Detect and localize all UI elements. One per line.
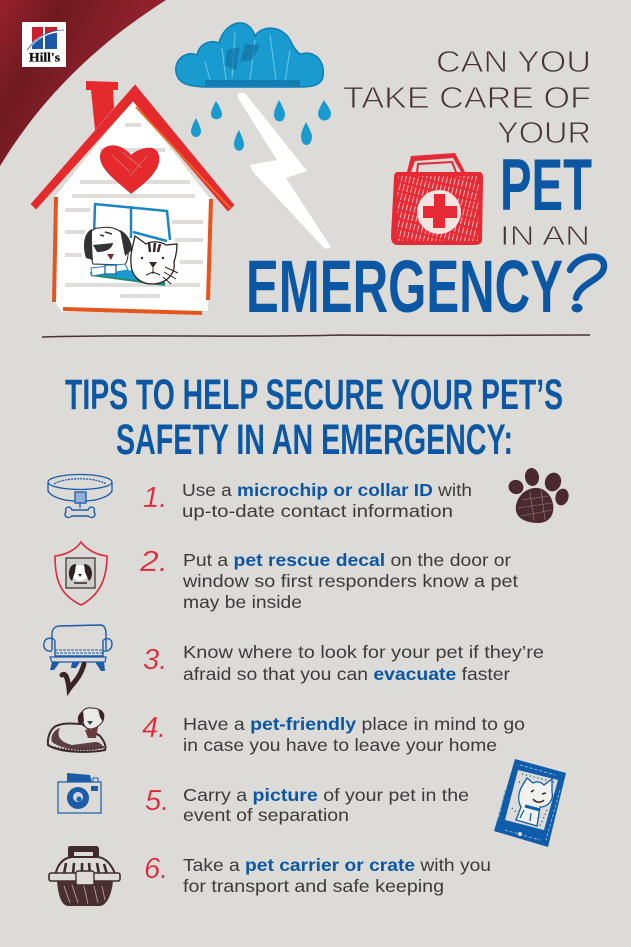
tip 1: up-to-date contact information xyxy=(182,501,453,521)
text 3: Know where to look for your pet if they’re xyxy=(183,642,544,662)
red corner banner xyxy=(0,0,166,166)
walls xyxy=(54,197,211,313)
text 6: Take a pet carrier or crate with you xyxy=(183,855,491,875)
icon: rain drops xyxy=(191,100,331,151)
icon: sofa with hiding pet tail xyxy=(44,625,112,689)
tip 3: afraid so that you can evacuate faster xyxy=(183,664,510,684)
text 2: Put a pet rescue decal on the door or xyxy=(183,550,511,570)
number 3: 3. xyxy=(143,644,167,676)
text 1: Use a microchip or collar ID with xyxy=(182,480,472,500)
icon: first aid kit xyxy=(391,153,483,245)
number 5: 5. xyxy=(145,785,169,817)
tip 5 xyxy=(58,773,469,825)
Hill's logo xyxy=(22,22,66,67)
title: can you take care of your pet in an emergency: IN AN xyxy=(500,220,590,251)
roof xyxy=(32,86,233,210)
text 5: Carry a picture of your pet in the xyxy=(183,785,469,805)
heart xyxy=(100,145,159,194)
number 2: 2. xyxy=(139,546,168,578)
icon: lightning bolt xyxy=(238,93,331,249)
tip 2: window so first responders know a pet xyxy=(182,571,518,591)
title: can you take care of your pet in an emergency: YOUR xyxy=(497,115,591,150)
icon: paw print xyxy=(507,467,570,523)
number 1: 1. xyxy=(143,482,167,514)
Hill's logo: Hill's xyxy=(29,50,60,64)
icon: collar with bone xyxy=(48,474,112,517)
icon: camera xyxy=(58,773,101,813)
title: can you take care of your pet in an emergency: TAKE CARE OF xyxy=(343,80,591,115)
text 4: Have a pet-friendly place in mind to go xyxy=(183,714,525,734)
tip 1 xyxy=(48,474,472,521)
dog xyxy=(88,227,128,265)
icon: pet carrier xyxy=(49,846,120,906)
tip 2: may be inside xyxy=(183,592,302,612)
house body xyxy=(54,100,211,312)
heading: tips xyxy=(65,371,563,464)
icon: phone with pet photo xyxy=(494,759,566,847)
title: can you take care of your pet in an emergency xyxy=(246,44,604,328)
number 6: 6. xyxy=(144,853,168,885)
tip 6 xyxy=(49,846,491,906)
window xyxy=(94,204,170,241)
title: can you take care of your pet in an emergency: CAN YOU xyxy=(436,44,591,79)
chimney xyxy=(86,81,118,130)
tip 2 xyxy=(55,542,518,612)
tip 4: in case you have to leave your home xyxy=(183,735,497,755)
tip 6: for transport and safe keeping xyxy=(183,876,444,896)
number 4: 4. xyxy=(142,712,166,744)
tip 5: event of separation xyxy=(183,805,349,825)
cat xyxy=(131,236,177,284)
icon: house with dog and cat xyxy=(32,81,233,313)
divider line xyxy=(42,335,590,337)
icon: rain cloud xyxy=(176,23,323,87)
icon: pet rescue decal shield xyxy=(55,542,107,605)
icon: dog in a bed xyxy=(48,708,105,752)
tip 3 xyxy=(44,625,544,689)
tip 4 xyxy=(48,708,525,755)
